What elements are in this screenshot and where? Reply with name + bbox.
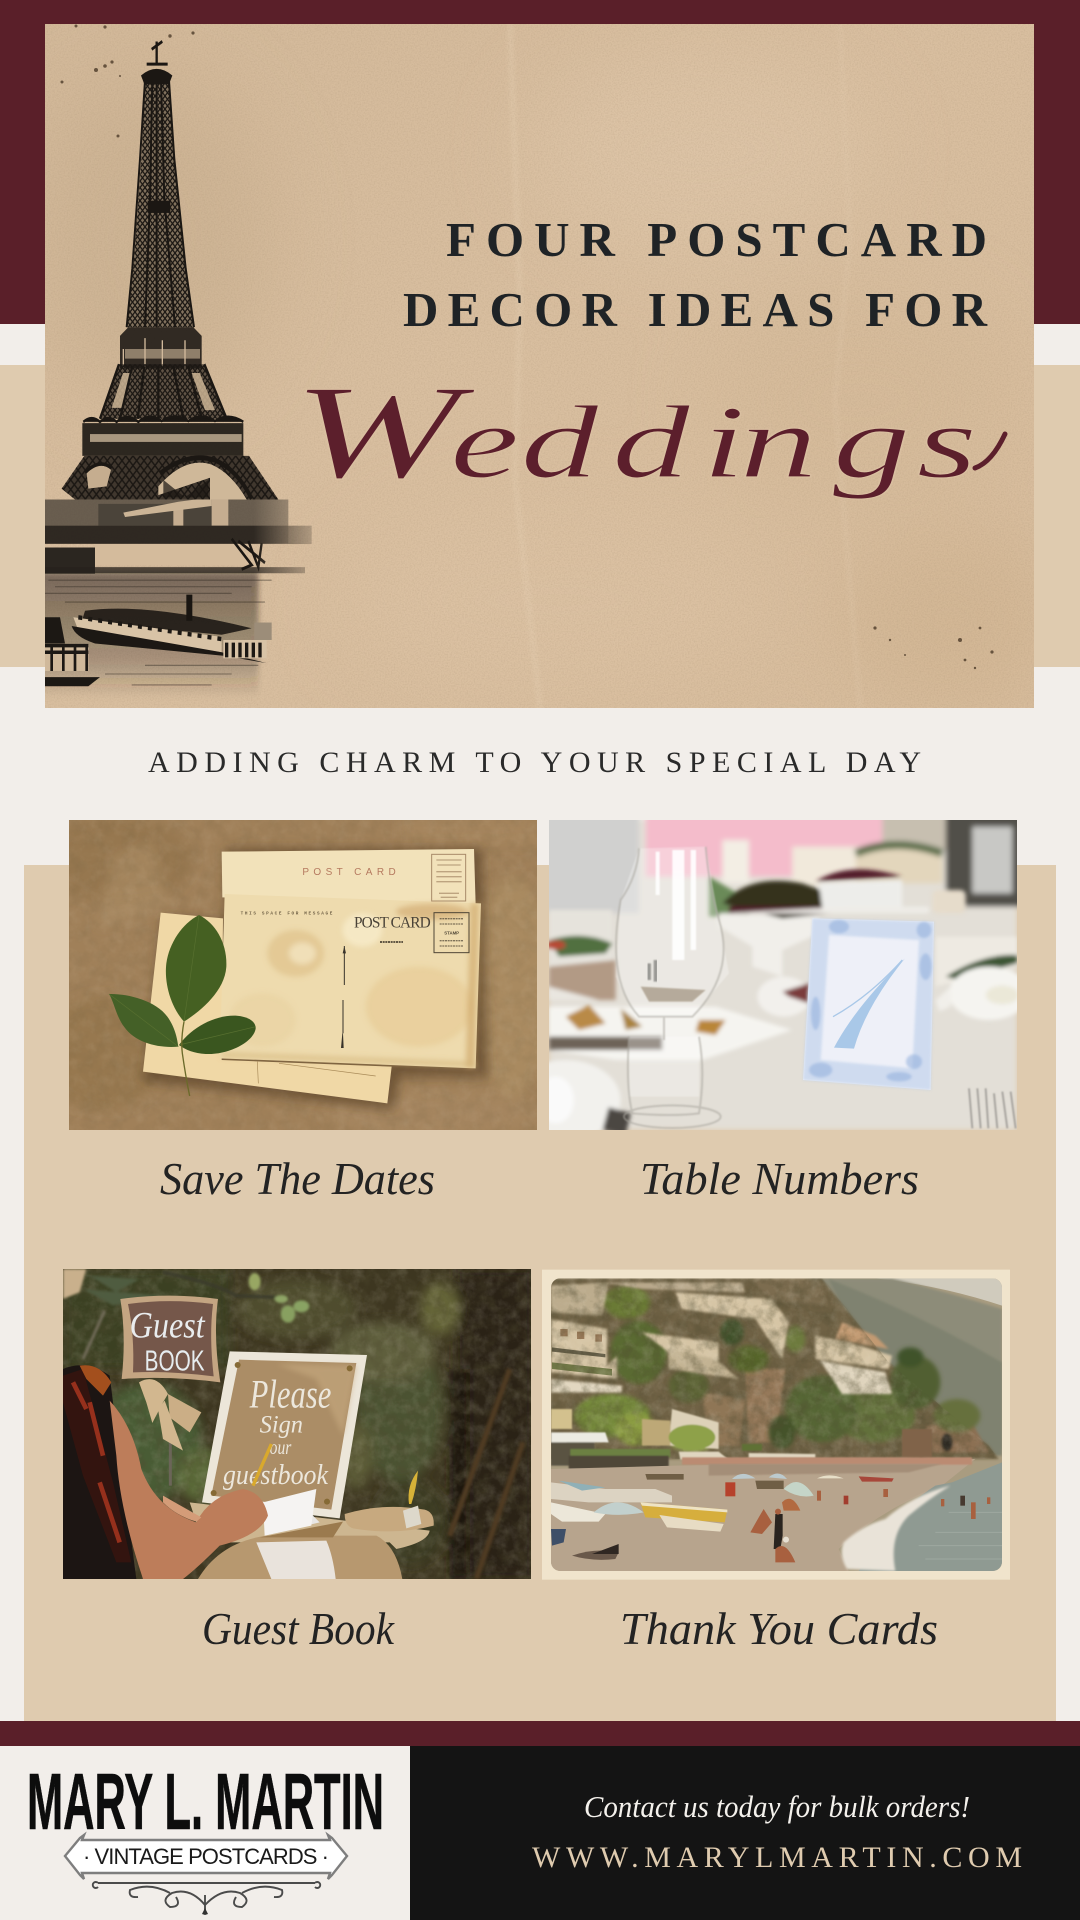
label: Save The Dates: Save The Dates	[160, 1153, 435, 1204]
cream postcard frame	[542, 1270, 1010, 1580]
tower second platform and legs	[100, 327, 227, 419]
wine glass	[616, 847, 729, 1128]
sky and distant mountains	[875, 1278, 1002, 1306]
hillside texture	[551, 1278, 1002, 1460]
back postcard: POST CARD	[302, 867, 396, 878]
logo wordmark: MARY L. MARTIN	[27, 1757, 384, 1846]
bottom postcard	[143, 913, 392, 1103]
photo: Thank You Cards Amalfi beach postcard	[542, 1270, 1010, 1580]
open guest book and paper	[260, 1489, 343, 1537]
table with burlap and lace runner	[190, 1471, 434, 1579]
back postcard	[222, 849, 476, 905]
contact: bulk orders line: Contact us today for bulk orders!	[584, 1789, 970, 1824]
photo: Guest Book signing table	[63, 1269, 533, 1579]
blue table number card	[803, 918, 934, 1090]
burlap bow	[139, 1379, 201, 1486]
burlap Please Sign sign: our	[270, 1437, 292, 1459]
heading: script Weddings: Weddings	[292, 358, 977, 506]
maroon top band	[0, 0, 1080, 324]
woman with scarf and writing arm	[63, 1365, 268, 1579]
waterfront buildings and awnings	[551, 1409, 932, 1469]
panel: header vintage paper	[30, 24, 1060, 710]
front stained postcard: POST CARD	[354, 914, 431, 931]
label: Table Numbers: Table Numbers	[640, 1153, 919, 1204]
stylised number one	[833, 958, 905, 1049]
photo: Table Numbers table setting	[511, 813, 1029, 1140]
subheading: ADDING CHARM TO YOUR SPECIAL DAY	[148, 746, 921, 779]
burlap Please Sign sign: Sign	[260, 1410, 303, 1438]
label: Thank You Cards: Thank You Cards	[620, 1603, 938, 1654]
wooden Guest Book sign	[120, 1296, 220, 1382]
burlap Please Sign sign: guestbook	[223, 1459, 329, 1491]
paper texture	[30, 24, 1060, 710]
fork	[969, 1088, 1016, 1128]
riverboat	[72, 595, 272, 663]
front stained postcard: STAMP	[444, 931, 459, 936]
heading: four postcard decor ideas for: FOUR POSTCARD	[446, 212, 987, 267]
beach scene	[551, 1278, 1002, 1571]
hillside buildings	[551, 1282, 892, 1394]
wooden Guest Book sign: BOOK	[145, 1346, 205, 1378]
panel: logo background	[0, 1746, 410, 1920]
panel: contact background	[410, 1746, 1080, 1920]
illustration: Eiffel Tower and river scene	[38, 41, 312, 698]
hillside rock	[551, 1279, 999, 1459]
tower first platform and base arches	[62, 417, 278, 500]
pebble beach	[551, 1459, 975, 1571]
green vegetation	[574, 1286, 980, 1452]
tan content panel	[24, 865, 1056, 1721]
wooden Guest Book sign: Guest	[130, 1305, 206, 1346]
label: Guest Book: Guest Book	[202, 1603, 395, 1654]
front stained postcard: THIS SPACE FOR MESSAGE	[241, 911, 333, 916]
maroon divider band	[0, 1721, 1080, 1746]
front stained postcard	[220, 894, 481, 1068]
logo badge	[65, 1835, 347, 1879]
photo: Save The Dates postcards	[39, 817, 552, 1137]
burlap Please Sign sign	[202, 1351, 367, 1518]
tan band behind header	[0, 365, 1080, 667]
heading: four postcard decor ideas for	[404, 224, 988, 326]
logo ornament flourish	[93, 1882, 320, 1912]
blurred room background	[542, 813, 1022, 1130]
small boat	[45, 617, 100, 686]
blurred foliage background	[63, 1269, 533, 1579]
burlap Please Sign sign: Please	[249, 1371, 331, 1416]
kraft paper background	[69, 820, 537, 1130]
river and quay	[45, 500, 312, 693]
tower top section	[127, 41, 194, 327]
table dishes	[549, 866, 1017, 1130]
beached boats and umbrellas	[551, 1474, 894, 1560]
logo badge: · VINTAGE POSTCARDS ·	[83, 1844, 329, 1869]
heading: four postcard decor ideas for: DECOR IDEAS FOR	[403, 282, 988, 337]
sea and surf	[859, 1462, 1002, 1571]
beachgoers	[750, 1489, 990, 1562]
logo: Mary L. Martin Vintage Postcards	[27, 1757, 384, 1915]
card shadows	[144, 848, 488, 1110]
green leaves	[109, 915, 256, 1096]
contact: website: WWW.MARYLMARTIN.COM	[532, 1841, 1022, 1874]
